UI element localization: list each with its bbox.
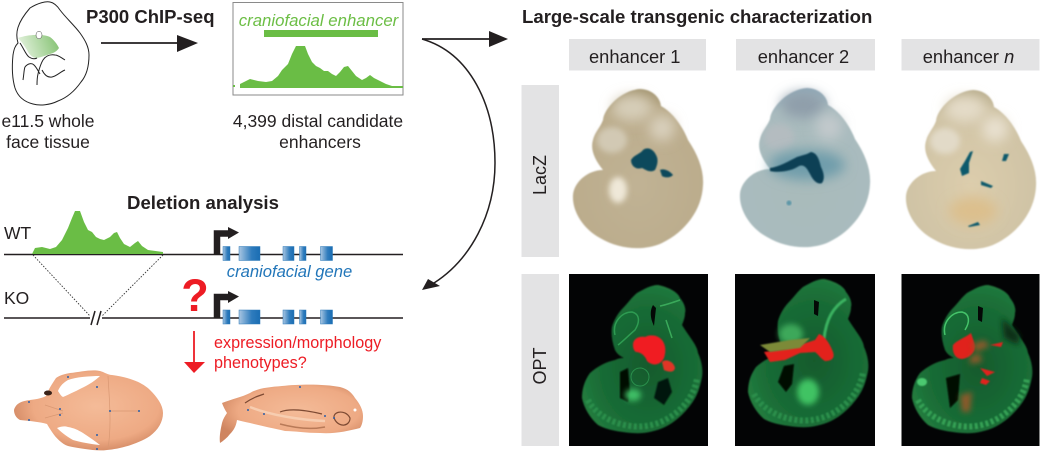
- row label: LacZ: [522, 85, 559, 257]
- heading: P300 ChIP-seq: P300 ChIP-seq: [86, 6, 215, 27]
- label: 4,399 distal candidate enhancers: enhancers: [279, 132, 361, 152]
- column header: enhancer n: enhancer n: [923, 46, 1014, 67]
- red question mark: ?: [181, 270, 209, 321]
- label: 4,399 distal candidate enhancers: [233, 111, 403, 152]
- column header: enhancer 2: enhancer 2: [758, 46, 849, 67]
- skull: dorsal view: [14, 370, 163, 450]
- LacZ embryo n: [906, 90, 1036, 249]
- label: e11.5 whole face tissue: [1, 111, 95, 152]
- OPT panel 1: [569, 274, 708, 446]
- column header: enhancer 2: [736, 39, 875, 70]
- panel: KO locus: KO: [4, 288, 29, 308]
- heading: Large-scale transgenic characterization: Large-scale transgenic characterization: [522, 6, 872, 27]
- label: e11.5 whole face tissue: e11.5 whole: [1, 111, 95, 131]
- label: expression/morphology phenotypes?: phenotypes?: [214, 354, 307, 372]
- row label: LacZ: LacZ: [530, 155, 550, 195]
- arrow: red down: [184, 331, 205, 373]
- OPT panel n: [902, 274, 1040, 446]
- panel: ChIP-seq track: craniofacial enhancer: [239, 11, 400, 30]
- column header: enhancer 1: [569, 39, 706, 70]
- LacZ embryo 2: [740, 88, 870, 247]
- column header: enhancer n: [902, 39, 1040, 70]
- OPT panel 2: [735, 274, 875, 446]
- row label: OPT: [522, 274, 559, 446]
- label: expression/morphology phenotypes?: expression/morphology: [214, 334, 382, 352]
- label: expression/morphology phenotypes?: [214, 334, 382, 372]
- panel: ChIP-seq track: [233, 2, 403, 95]
- arrow: to ChIP-seq track: [101, 35, 198, 52]
- panel: WT locus: [4, 211, 403, 260]
- deletion dotted lines: [33, 255, 163, 316]
- panel: KO locus: [4, 288, 403, 325]
- LacZ embryo 1: [573, 89, 703, 248]
- row label: OPT: OPT: [530, 347, 550, 385]
- icon: embryo head sketch: [12, 2, 89, 105]
- heading: Deletion analysis: Deletion analysis: [127, 192, 279, 213]
- label: craniofacial gene: craniofacial gene: [227, 262, 352, 281]
- column header: enhancer 1: enhancer 1: [589, 46, 680, 67]
- label: 4,399 distal candidate enhancers: 4,399 distal candidate: [233, 111, 403, 131]
- label: e11.5 whole face tissue: face tissue: [6, 132, 90, 152]
- skull: lateral view: [220, 385, 363, 443]
- panel: WT locus: WT: [4, 223, 32, 243]
- curved arrows: forward to transgenic and deletion analysis: [422, 31, 508, 290]
